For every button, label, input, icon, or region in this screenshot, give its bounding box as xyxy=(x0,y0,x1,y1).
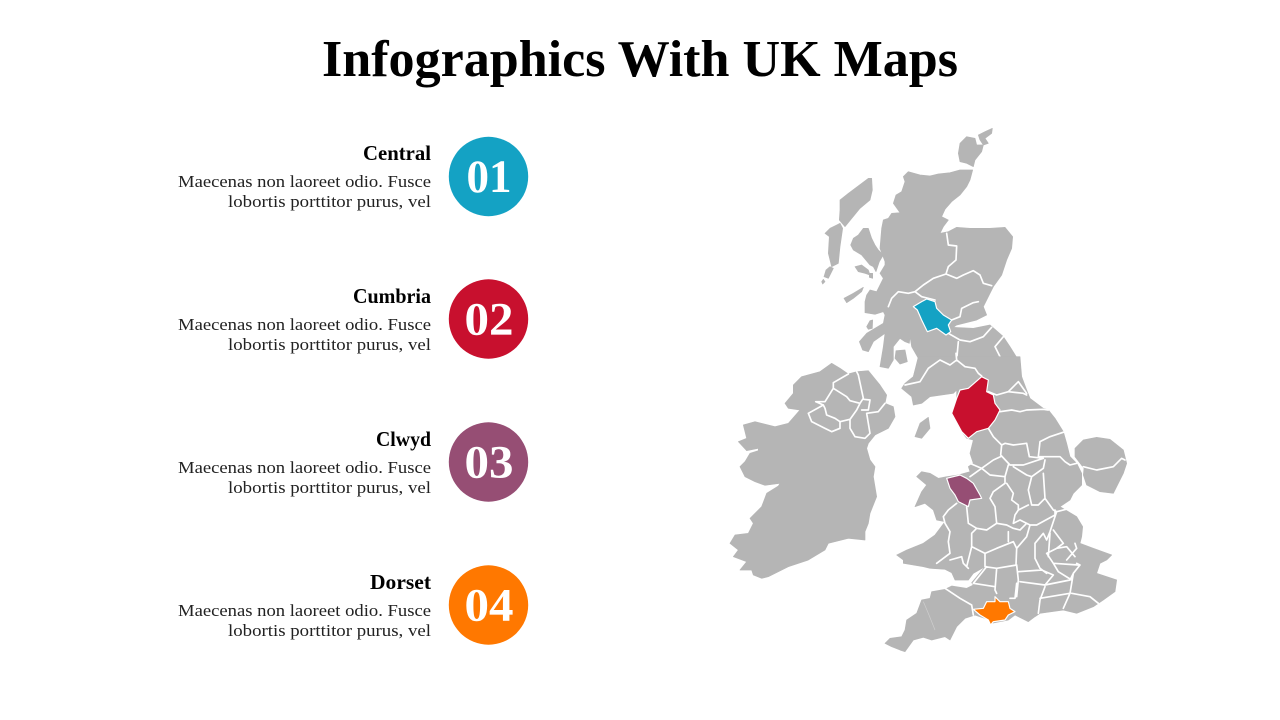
region: Clwyd (highlighted) xyxy=(947,475,982,507)
region: Central (highlighted) xyxy=(913,299,952,335)
title: Infographics With UK Maps xyxy=(322,31,958,88)
description 01: lobortis porttitor purus, vel xyxy=(228,192,431,211)
number badge 01: 01 xyxy=(466,151,512,203)
description 04: lobortis porttitor purus, vel xyxy=(228,621,431,640)
description 03: lobortis porttitor purus, vel xyxy=(228,478,431,497)
region: East Anglia xyxy=(1075,437,1127,493)
region boundaries: England and Wales xyxy=(905,353,1125,615)
number badge 01 xyxy=(449,137,528,216)
number badge 03 xyxy=(449,422,528,502)
number badge 04 xyxy=(449,565,528,645)
item 04: Dorset xyxy=(178,565,528,645)
UK and Ireland map xyxy=(730,128,1127,652)
map: Scotland xyxy=(822,128,1022,380)
item 02: Cumbria xyxy=(178,279,528,359)
region boundaries: Scotland xyxy=(888,233,1003,377)
description 04 xyxy=(178,601,431,640)
description 02: Maecenas non laoreet odio. Fusce xyxy=(178,315,431,334)
number badge 03: 03 xyxy=(464,436,514,488)
island: Isle of Man xyxy=(915,417,930,438)
item 01: Central xyxy=(178,137,528,216)
map: Ireland xyxy=(730,363,895,578)
description 01 xyxy=(178,172,431,211)
heading: Cumbria: Cumbria xyxy=(353,284,431,308)
description 02: lobortis porttitor purus, vel xyxy=(228,335,431,354)
heading: Dorset: Dorset xyxy=(370,570,431,594)
region: Cumbria (highlighted) xyxy=(952,377,1000,438)
number badge 04: 04 xyxy=(464,580,514,632)
map: England and Wales xyxy=(885,353,1127,652)
description 04: Maecenas non laoreet odio. Fusce xyxy=(178,601,431,620)
item 03: Clwyd xyxy=(178,422,528,502)
description 01: Maecenas non laoreet odio. Fusce xyxy=(178,172,431,191)
islands: Hebrides, Orkney, Shetland xyxy=(822,178,907,364)
description 02 xyxy=(178,315,431,354)
number badge 02 xyxy=(449,279,528,359)
heading: Central: Central xyxy=(363,141,431,165)
heading: Clwyd: Clwyd xyxy=(376,427,431,451)
region: Dorset (highlighted) xyxy=(973,597,1015,625)
boundary: Devon and Cornwall xyxy=(923,602,935,630)
description 03 xyxy=(178,458,431,497)
region boundaries: Northern Ireland xyxy=(808,372,885,438)
description 03: Maecenas non laoreet odio. Fusce xyxy=(178,458,431,477)
number badge 02: 02 xyxy=(464,294,514,346)
